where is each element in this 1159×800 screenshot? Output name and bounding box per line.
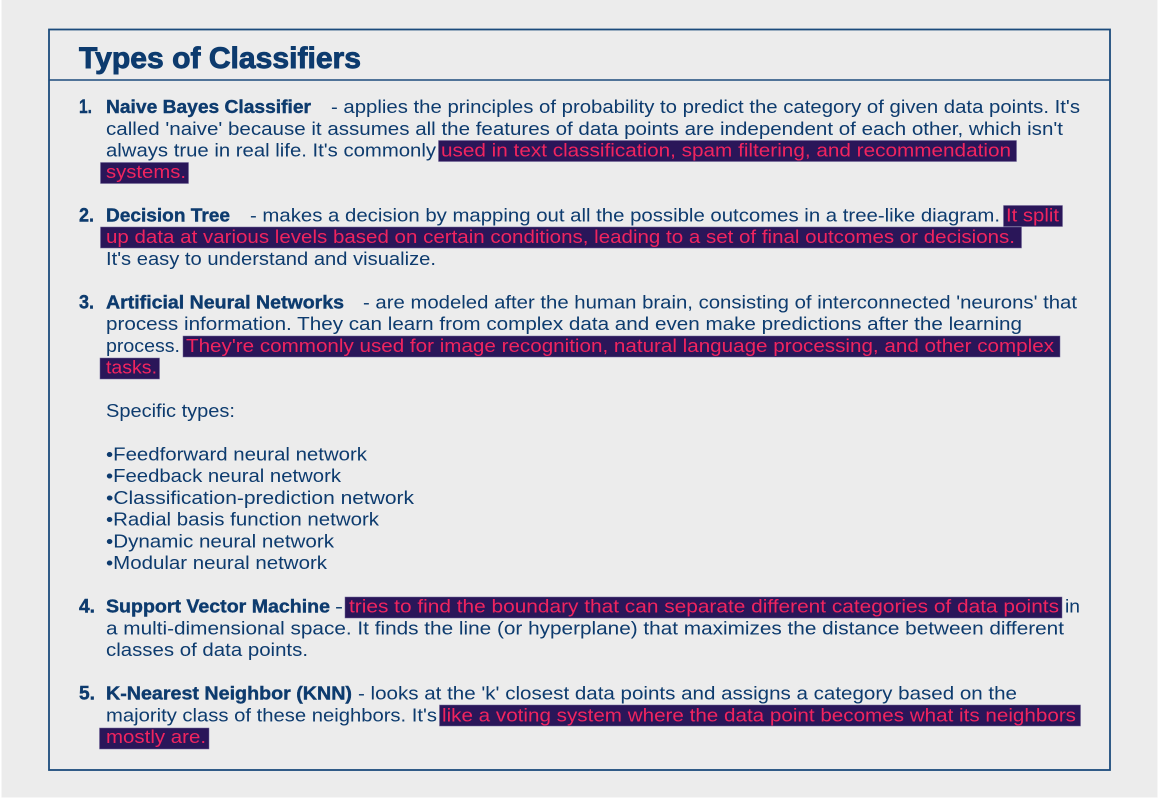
list item 5: K-Nearest Neighbor: majority class of these neighbors. It's xyxy=(106,704,437,726)
specific types list: •Classification-prediction network xyxy=(106,487,415,508)
list item 4: Support Vector Machine: classes of data points. xyxy=(106,639,308,660)
specific types list: Specific types: xyxy=(106,400,235,421)
specific types list: •Dynamic neural network xyxy=(106,530,335,552)
list item 3: Artificial Neural Networks: tasks. xyxy=(106,356,157,378)
list item 3: Artificial Neural Networks: Artificial Neural Networks xyxy=(106,292,344,312)
list item 2: Decision Tree: It split xyxy=(1006,204,1059,226)
list item 4: Support Vector Machine: tries to find the boundary that can separate different categories of data points xyxy=(349,596,1059,616)
list item 1: Naive Bayes Classifier: called 'naive' because it assumes all the features of data points are independent of each other, which isn't xyxy=(106,118,1063,139)
specific types list: •Modular neural network xyxy=(106,552,328,573)
list item 5: K-Nearest Neighbor: like a voting system where the data point becomes what its neighbors xyxy=(442,704,1076,726)
list item 1: Naive Bayes Classifier: Naive Bayes Classifier xyxy=(106,96,311,117)
list item 4: Support Vector Machine xyxy=(79,596,1080,660)
specific types list: •Feedforward neural network xyxy=(106,444,368,464)
list item 2: Decision Tree: up data at various levels based on certain conditions, leading to a set of final outcomes or decisions. xyxy=(106,226,1015,247)
list item 5: K-Nearest Neighbor: mostly are. xyxy=(106,726,206,747)
list item 1: Naive Bayes Classifier: used in text classification, spam filtering, and recommendation xyxy=(441,140,1011,160)
list item 3: Artificial Neural Networks: process information. They can learn from complex data and even make predictions after the learning xyxy=(106,313,1022,334)
list item 3: Artificial Neural Networks: 3. xyxy=(79,292,94,314)
list item 2: Decision Tree: - makes a decision by mapping out all the possible outcomes in a tree-like diagram. xyxy=(250,204,1000,226)
list item 5: K-Nearest Neighbor: K-Nearest Neighbor (KNN) xyxy=(106,682,352,704)
list item 1: Naive Bayes Classifier: - applies the principles of probability to predict the category of given data points. It's xyxy=(331,96,1080,117)
list item 5: K-Nearest Neighbor: - looks at the 'k' closest data points and assigns a category based on the xyxy=(358,682,1017,704)
list item 1: Naive Bayes Classifier: 1. xyxy=(79,96,92,118)
list item 5: K-Nearest Neighbor xyxy=(79,682,1080,749)
list item 1: Naive Bayes Classifier: systems. xyxy=(106,161,186,182)
list item 4: Support Vector Machine: a multi-dimensional space. It finds the line (or hyperplane) that maximizes the distance between different xyxy=(106,618,1064,638)
list item 2: Decision Tree: It's easy to understand and visualize. xyxy=(106,248,436,269)
list item 4: Support Vector Machine: Support Vector Machine xyxy=(106,596,330,616)
list item 1: Naive Bayes Classifier: always true in real life. It's commonly xyxy=(106,140,437,160)
specific types list xyxy=(106,400,415,573)
list item 2: Decision Tree: Decision Tree xyxy=(106,204,230,226)
list item 2: Decision Tree xyxy=(79,204,1062,269)
list item 4: Support Vector Machine: 4. xyxy=(79,596,95,618)
list item 3: Artificial Neural Networks xyxy=(79,292,1077,379)
specific types list: •Feedback neural network xyxy=(106,465,342,486)
list item 3: Artificial Neural Networks: - are modeled after the human brain, consisting of interconnected 'neurons' that xyxy=(363,292,1077,312)
list item 3: Artificial Neural Networks: They're commonly used for image recognition, natural language processing, and other complex xyxy=(186,335,1055,356)
title: Types of Classifiers xyxy=(79,42,361,75)
list item 4: Support Vector Machine: in xyxy=(1065,596,1080,616)
list item 4: Support Vector Machine: - xyxy=(335,596,343,616)
list item 3: Artificial Neural Networks: process. xyxy=(106,335,180,356)
list item 1: Naive Bayes Classifier xyxy=(79,96,1080,184)
list item 2: Decision Tree: 2. xyxy=(79,204,94,226)
specific types list: •Radial basis function network xyxy=(106,508,380,530)
list item 5: K-Nearest Neighbor: 5. xyxy=(79,682,95,704)
